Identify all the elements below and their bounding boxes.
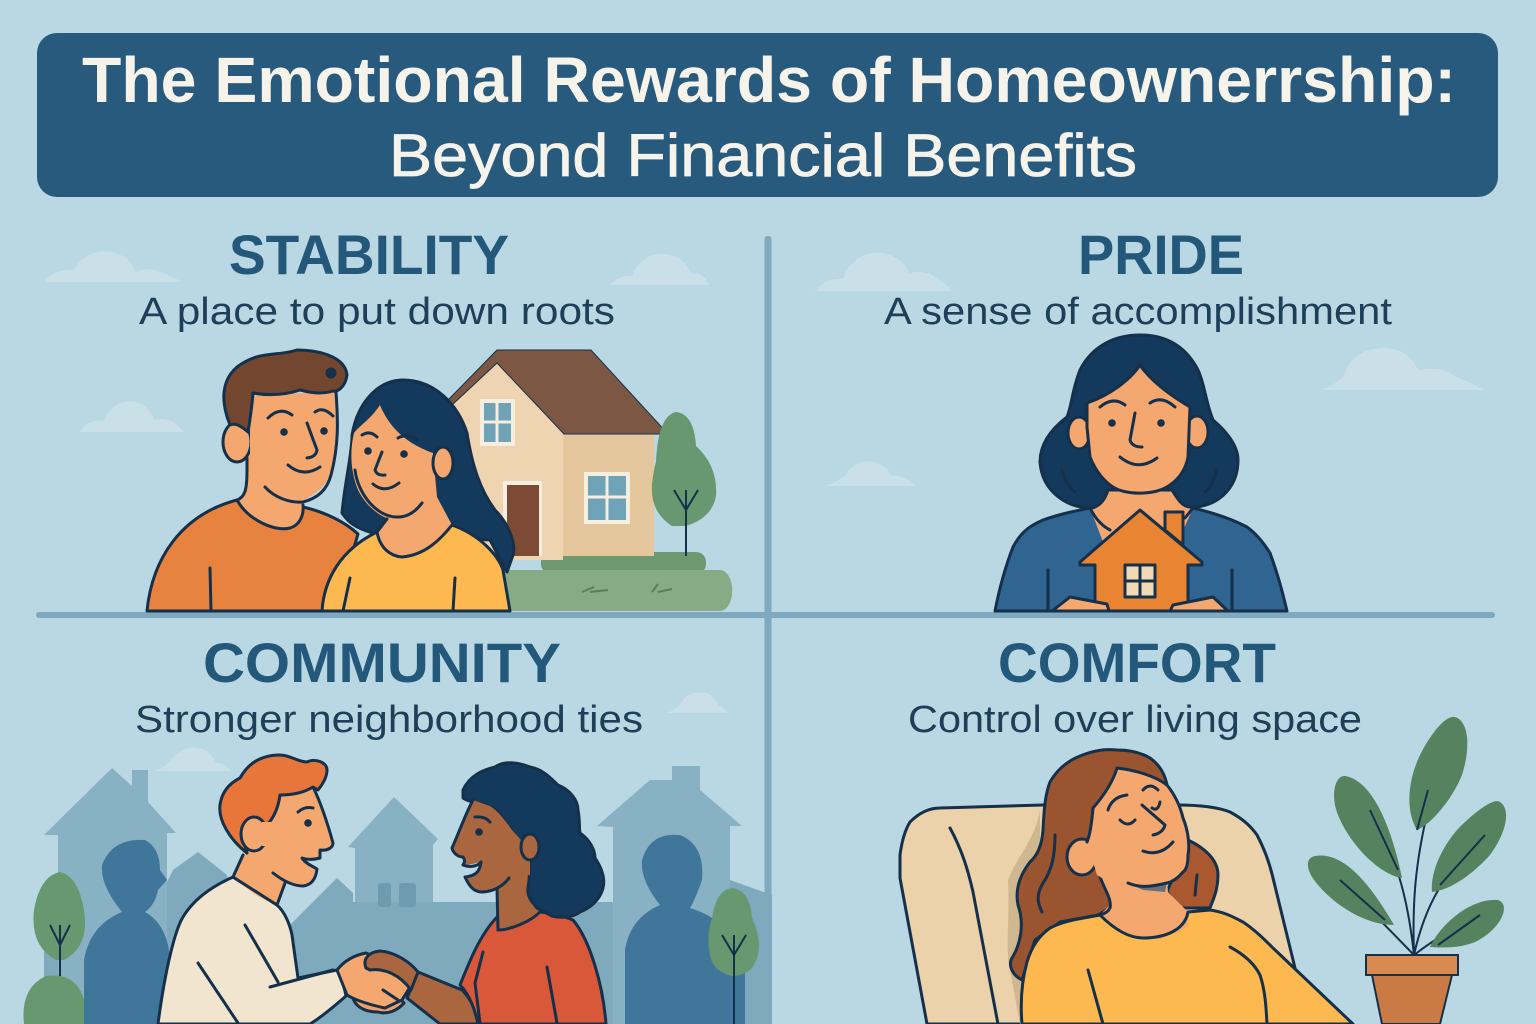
subheading: comfort: Control over living space xyxy=(908,699,1362,741)
illustration: woman shaking hands xyxy=(407,763,606,1024)
title banner: The Emotional Rewards of Homeownerrship: xyxy=(82,44,1456,116)
panel: community background xyxy=(23,766,772,1024)
illustration: potted plant xyxy=(1308,717,1506,1024)
subheading: community: Stronger neighborhood ties xyxy=(135,699,643,741)
silhouettes: neighbors xyxy=(84,835,745,1024)
silhouettes: neighborhood houses xyxy=(44,766,772,1024)
panel: community xyxy=(135,631,643,1024)
panel: stability xyxy=(139,223,732,611)
dividers xyxy=(36,236,1495,1024)
illustration: man shaking hands xyxy=(158,755,418,1024)
heading: comfort: COMFORT xyxy=(998,631,1276,694)
illustration: woman in yellow xyxy=(322,380,514,611)
heading: pride: PRIDE xyxy=(1078,223,1244,286)
title banner xyxy=(37,33,1498,197)
clouds background xyxy=(44,251,1484,771)
illustration: house with tree xyxy=(448,350,732,611)
heading: community: COMMUNITY xyxy=(203,631,561,694)
title banner: Beyond Financial Benefits xyxy=(389,122,1137,189)
illustration: man in orange xyxy=(147,350,358,611)
panel: pride xyxy=(884,223,1392,611)
subheading: stability: A place to put down roots xyxy=(139,291,615,333)
illustration: trees xyxy=(23,872,759,1024)
panel: comfort xyxy=(900,631,1506,1024)
subheading: pride: A sense of accomplishment xyxy=(884,291,1392,333)
illustration: armchair xyxy=(900,805,1310,1024)
illustration: relaxing woman xyxy=(1010,750,1353,1024)
illustration: woman holding house xyxy=(995,335,1287,611)
heading: stability: STABILITY xyxy=(229,223,509,286)
